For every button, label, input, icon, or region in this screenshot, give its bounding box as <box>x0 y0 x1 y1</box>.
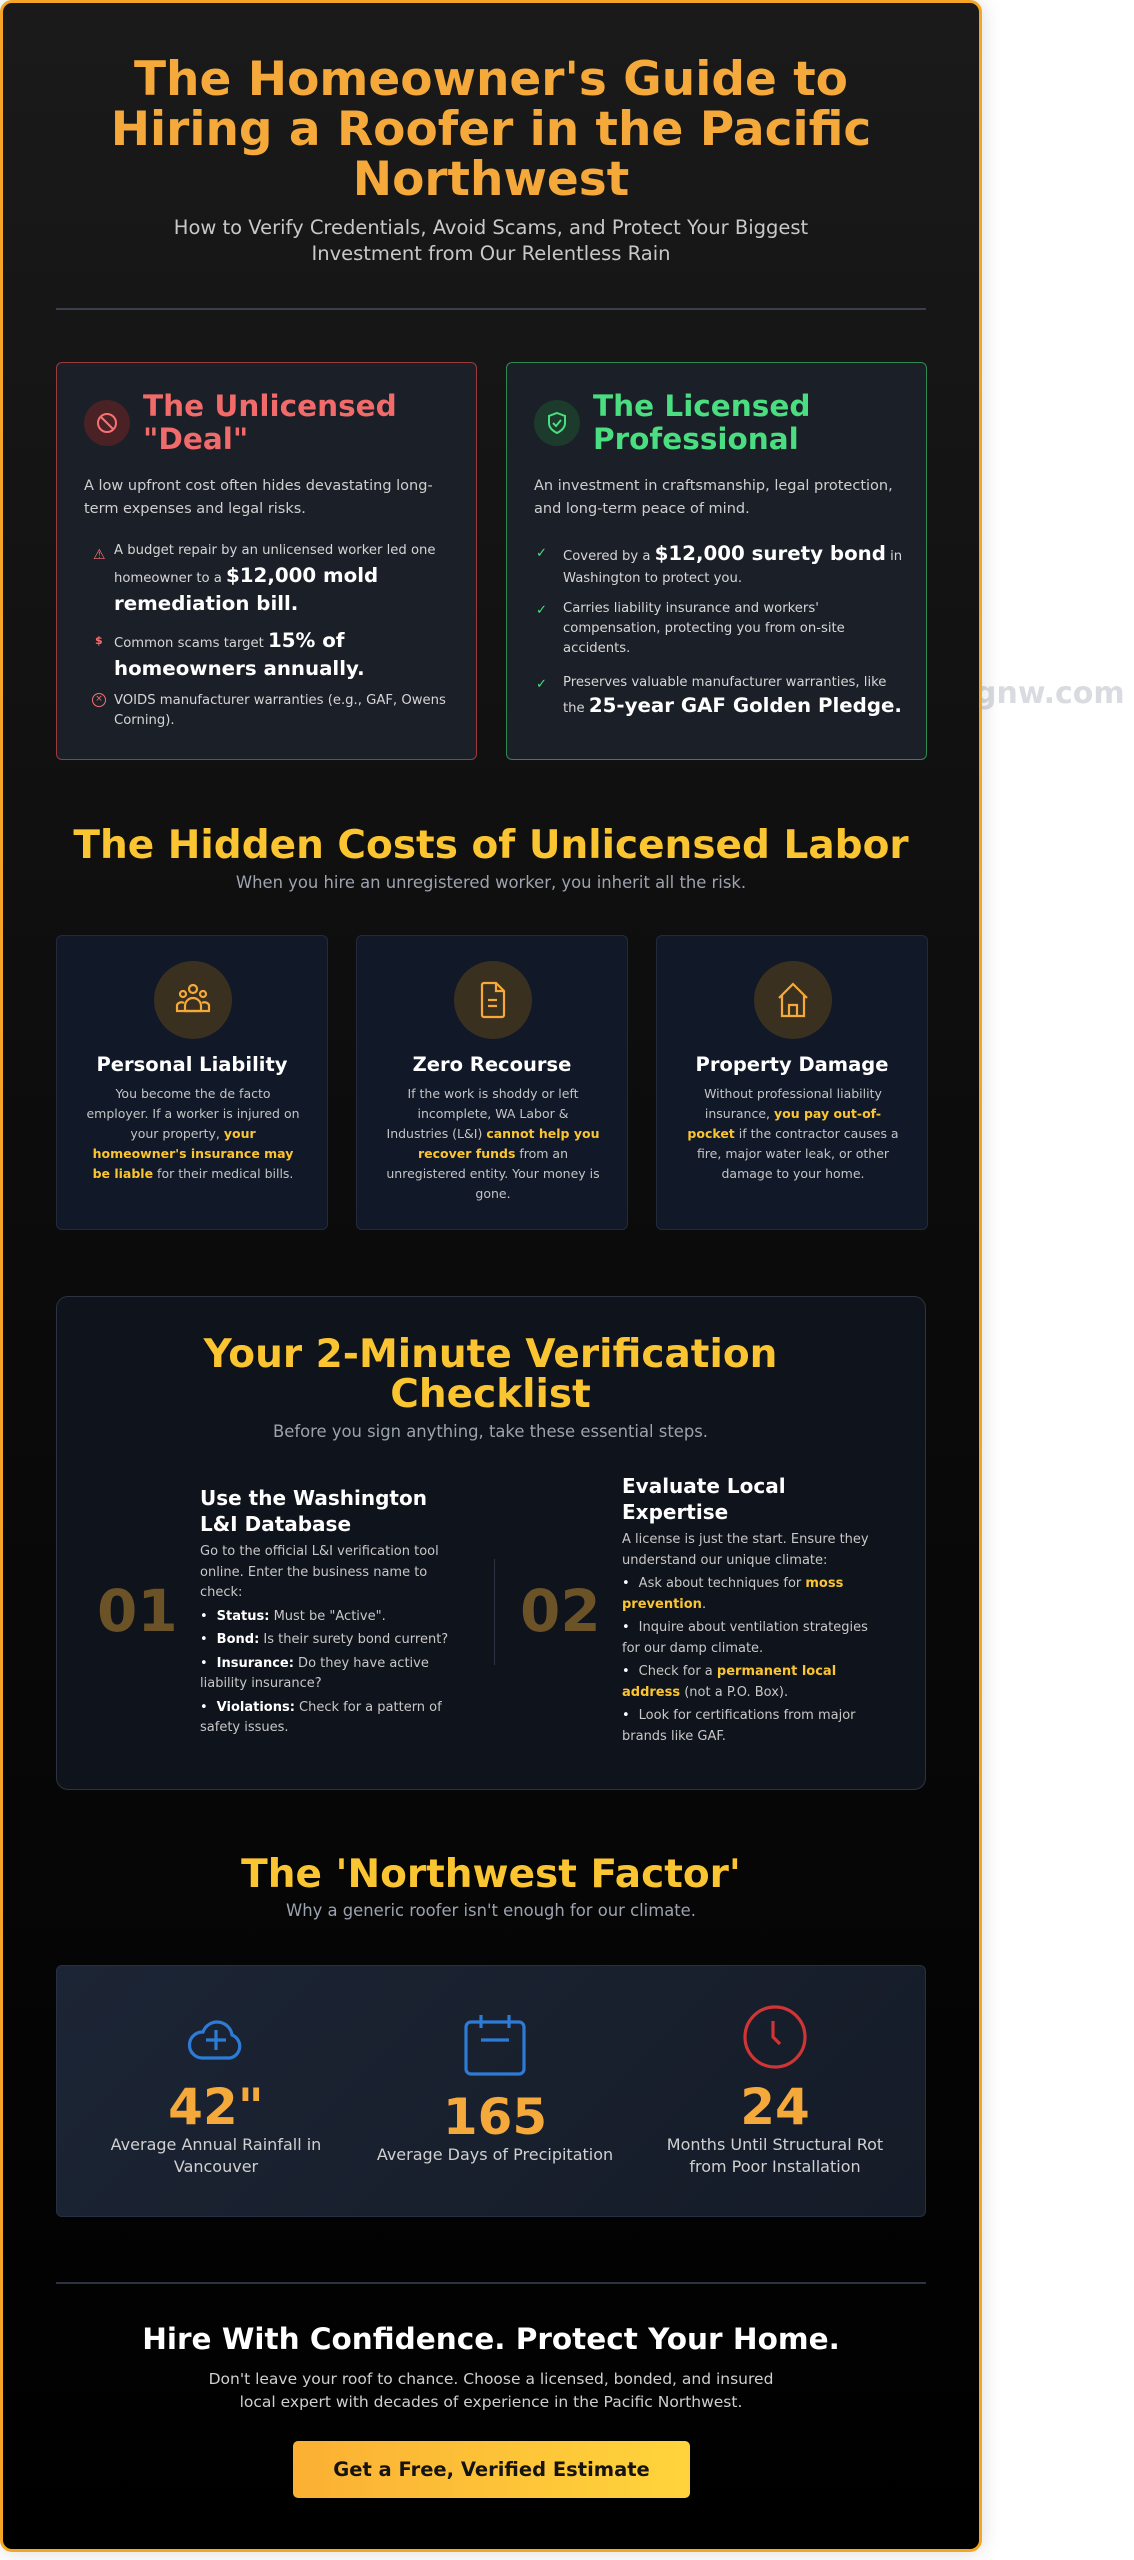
step number 02: 02 <box>520 1577 601 1645</box>
panel: verification checklist <box>56 1296 926 1790</box>
card: property damage: Property Damage <box>696 1053 888 1076</box>
stat: months <box>667 2005 883 2176</box>
step 2: Check for a permanent local address (not a P.O. Box). <box>622 1664 836 1700</box>
card: property damage <box>656 935 928 1230</box>
subtitle: How to Verify Credentials, Avoid Scams, and Protect Your Biggest Investment from Our Relentless Rain <box>174 216 808 265</box>
step 1: Violations: Check for a pattern of safety issues. <box>200 1700 442 1735</box>
card: personal liability: You become the de facto employer. If a worker is injured on your property, your homeowner's insurance may be liable for their medical bills. <box>86 1086 300 1181</box>
item: surety bond: Covered by a $12,000 surety bond in Washington to protect you. <box>563 542 902 586</box>
step 1: Use the Washington <box>200 1486 427 1510</box>
panel: unlicensed deal <box>56 362 477 760</box>
subheading: hidden costs: When you hire an unregistered worker, you inherit all the risk. <box>236 873 746 892</box>
step 2 <box>622 1474 869 1744</box>
item: insurance: Carries liability insurance and workers' compensation, protecting you from on-site accidents. <box>563 601 845 656</box>
heading: "Deal" <box>143 422 248 456</box>
CTA button: Get a Free, Verified Estimate <box>333 2458 650 2481</box>
heading: hidden costs: The Hidden Costs of Unlicensed Labor <box>73 823 909 868</box>
panel: stats <box>56 1965 926 2217</box>
step 1 <box>200 1486 448 1735</box>
step 2: Inquire about ventilation strategies for our damp climate. <box>622 1620 868 1656</box>
panel: unlicensed deal: $ <box>95 634 103 647</box>
icon: clock <box>743 2005 807 2069</box>
heading: Professional <box>593 422 799 456</box>
title: The Homeowner's Guide to <box>134 52 848 107</box>
stat: days <box>377 2015 613 2164</box>
CTA heading: Hire With Confidence. Protect Your Home. <box>142 2322 840 2356</box>
step 1: Insurance: Do they have active liability insurance? <box>200 1656 429 1691</box>
card: zero recourse: If the work is shoddy or left incomplete, WA Labor & Industries (L&I) cannot help you recover funds from an unregistered entity. Your money is gone. <box>386 1086 600 1201</box>
icon: document <box>454 961 532 1039</box>
step 2: Look for certifications from major brands like GAF. <box>622 1708 856 1744</box>
item: warranty <box>536 675 902 717</box>
CTA button <box>293 2441 690 2498</box>
title: Hiring a Roofer in the Pacific <box>111 102 871 157</box>
card: property damage: Without professional liability insurance, you pay out-of-pocket if the contractor causes a fire, major water leak, or other damage to your home. <box>687 1086 899 1181</box>
step 2: Evaluate Local <box>622 1474 786 1498</box>
item: mold bill: A budget repair by an unlicensed worker led one homeowner to a $12,000 mold remediation bill. <box>114 543 436 615</box>
description: An investment in craftsmanship, legal protection, and long-term peace of mind. <box>534 478 893 517</box>
heading: Checklist <box>390 1372 591 1417</box>
card: zero recourse: Zero Recourse <box>413 1053 571 1076</box>
stat: rainfall: 42" <box>168 2078 264 2136</box>
stat: rainfall <box>110 2020 321 2176</box>
CTA paragraph: Don't leave your roof to chance. Choose a licensed, bonded, and insured local expert with decades of experience in the Pacific Northwest. <box>209 2370 773 2411</box>
item: voids warranties: VOIDS manufacturer warranties (e.g., GAF, Owens Corning). <box>114 693 446 728</box>
subheading: northwest factor: Why a generic roofer isn't enough for our climate. <box>286 1901 696 1920</box>
item: warranty: Preserves valuable manufacturer warranties, like <box>563 675 886 690</box>
title: Northwest <box>353 152 629 207</box>
icon: people <box>154 961 232 1039</box>
item: warranty: the 25-year GAF Golden Pledge. <box>563 694 902 717</box>
description: A low upfront cost often hides devastating long-term expenses and legal risks. <box>84 478 433 517</box>
heading: The Unlicensed <box>143 389 397 423</box>
title <box>111 52 871 207</box>
subheading: Before you sign anything, take these essential steps. <box>273 1422 708 1441</box>
step 2: Expertise <box>622 1500 728 1524</box>
stat: days: Average Days of Precipitation <box>377 2145 613 2164</box>
stat: rainfall: Average Annual Rainfall in Vancouver <box>111 2135 321 2176</box>
step 1: Bond: Is their surety bond current? <box>217 1632 448 1647</box>
stat: days: 165 <box>443 2088 547 2146</box>
icon: calendar <box>464 2015 526 2076</box>
stat: months: Months Until Structural Rot from Poor Installation <box>667 2135 883 2176</box>
card: personal liability: Personal Liability <box>97 1053 287 1076</box>
heading <box>203 1332 777 1417</box>
heading <box>143 389 397 456</box>
watermark: gnw.com <box>975 676 1125 711</box>
heading: The Licensed <box>593 389 810 423</box>
heading: Your 2-Minute Verification <box>204 1332 777 1377</box>
panel: licensed professional: ✓ <box>536 546 547 561</box>
panel: licensed professional <box>506 362 927 760</box>
step 2: Ask about techniques for moss prevention. <box>622 1576 843 1612</box>
heading <box>593 389 810 456</box>
heading: northwest factor: The 'Northwest Factor' <box>241 1852 741 1897</box>
step number 01: 01 <box>97 1577 178 1645</box>
panel: unlicensed deal: ⚠ <box>93 547 106 563</box>
icon: cloud <box>188 2020 242 2060</box>
icon: shield <box>534 400 580 446</box>
stat: months: 24 <box>740 2078 810 2136</box>
card: personal liability <box>56 935 328 1230</box>
item: scams: Common scams target 15% of homeowners annually. <box>114 629 365 680</box>
panel: licensed professional: ✓ <box>536 603 547 618</box>
icon: prohibited <box>84 400 130 446</box>
card: zero recourse <box>356 935 628 1230</box>
panel: unlicensed deal: × <box>95 694 103 704</box>
panel: licensed professional: ✓ <box>536 677 547 692</box>
step 2: A license is just the start. Ensure they understand our unique climate: <box>622 1532 869 1568</box>
step 1: Go to the official L&I verification tool online. Enter the business name to check: <box>200 1544 439 1600</box>
step 1: Status: Must be "Active". <box>217 1608 386 1624</box>
step 1: L&I Database <box>200 1512 351 1536</box>
icon: house <box>754 961 832 1039</box>
